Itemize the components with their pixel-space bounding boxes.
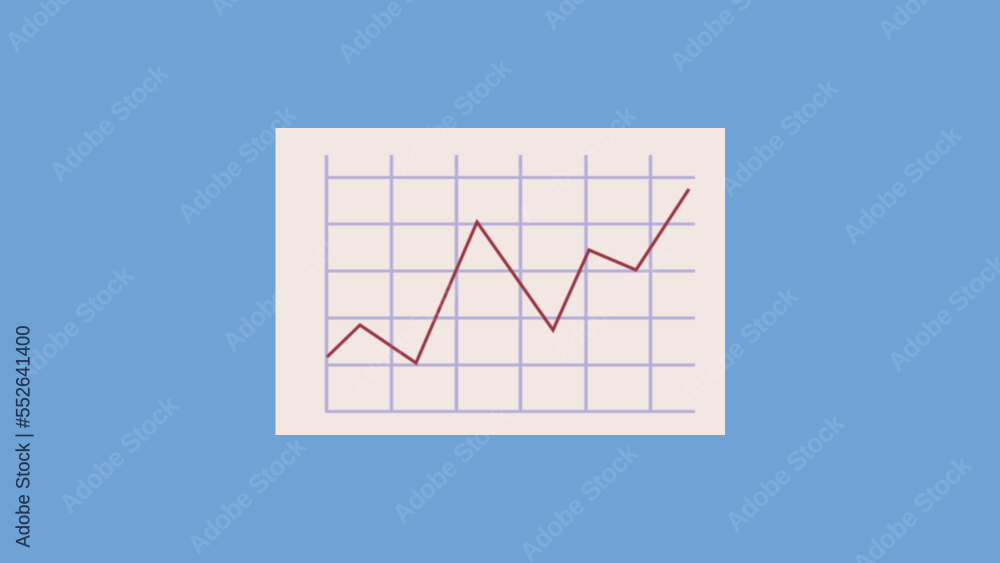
- watermarks: Adobe Stock: [836, 120, 967, 249]
- watermarks: Adobe Stock: [171, 100, 302, 229]
- watermarks: Adobe Stock: [386, 400, 517, 529]
- watermarks: Adobe Stock: [713, 73, 844, 202]
- watermarks: Adobe Stock: [43, 58, 174, 187]
- watermarks: Adobe Stock: [719, 408, 850, 537]
- watermarks: Adobe Stock: [511, 100, 642, 229]
- watermarks: Adobe Stock: [8, 260, 139, 389]
- watermarks: Adobe Stock: [673, 281, 804, 410]
- line chart series: [327, 189, 689, 363]
- watermarks: Adobe Stock: [216, 228, 347, 357]
- paper panel: [276, 128, 725, 435]
- watermarks: Adobe Stock: [386, 53, 517, 182]
- watermarks: Adobe Stock: [181, 431, 312, 560]
- watermarks: Adobe Stock: [341, 271, 472, 400]
- grid lines: [325, 155, 695, 413]
- watermarks: Adobe Stock: [53, 390, 184, 519]
- stock id text: Adobe Stock | #552641400: [12, 325, 34, 548]
- watermarks: Adobe Stock: [546, 238, 677, 367]
